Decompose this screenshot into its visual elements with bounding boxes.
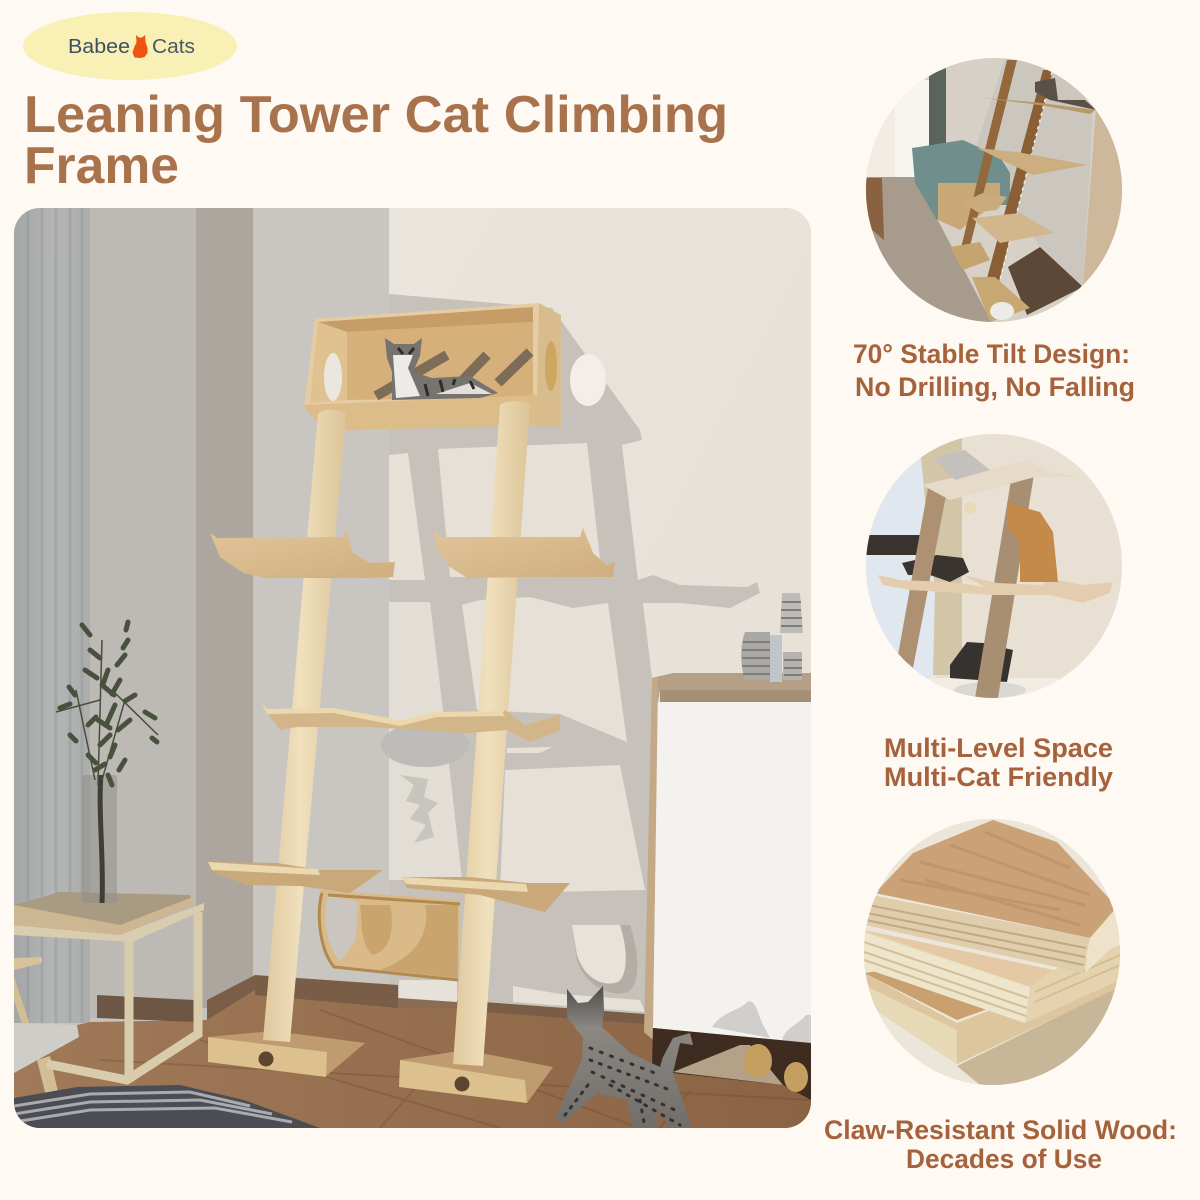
curtain	[14, 208, 90, 1023]
tower: sisal posts	[263, 401, 530, 1066]
icon: orange cat silhouette	[132, 35, 148, 58]
circular photo 2: cats on tower	[866, 434, 1122, 700]
tower: hanging tunnel	[318, 890, 460, 980]
shelves	[983, 98, 1095, 114]
back wall and side walls	[14, 208, 811, 1128]
title	[24, 86, 728, 195]
caption 1: No Drilling, No Falling	[855, 372, 1135, 402]
plant in glass vase	[56, 622, 158, 903]
main photo panel: cat tower in room	[14, 208, 811, 1128]
circular photo 3: solid wood planks	[864, 819, 1122, 1085]
cabinet	[644, 673, 811, 1100]
small white cat	[990, 302, 1014, 320]
logo badge	[23, 12, 237, 80]
caption 2: Multi-Cat Friendly	[884, 762, 1113, 792]
caption 1	[853, 339, 1135, 402]
bottom plank	[864, 960, 1120, 1064]
circular photo 1: tilted tower beside sofa	[866, 58, 1124, 323]
top shelf	[922, 460, 1082, 500]
brand name right: Cats	[152, 36, 195, 58]
table legs and frame	[47, 912, 198, 1082]
standing tabby cat	[555, 986, 693, 1128]
chair	[14, 957, 79, 1092]
wall and window	[918, 434, 1122, 679]
tower: base feet	[208, 1032, 553, 1103]
tower: top box with cat	[302, 303, 561, 431]
side table	[14, 892, 204, 1082]
caption 2: Multi-Level Space	[884, 733, 1113, 763]
caption 3: Claw-Resistant Solid Wood:	[824, 1115, 1177, 1145]
title: Frame	[24, 137, 179, 195]
leaning posts	[960, 60, 1017, 254]
dark cat at top	[1035, 78, 1096, 110]
posts	[898, 488, 947, 668]
tower: lower shelves	[208, 862, 570, 912]
floor	[866, 177, 992, 323]
metal canisters	[741, 593, 803, 682]
black cat lower	[950, 642, 1013, 682]
glass bowl reflection	[381, 728, 469, 767]
grey cat	[933, 450, 990, 480]
floor and skirting	[14, 975, 811, 1128]
middle plank	[864, 930, 1120, 1023]
title: Leaning Tower Cat Climbing	[24, 86, 728, 144]
sofa	[912, 140, 1010, 220]
caption 3	[824, 1115, 1177, 1174]
caption 3: Decades of Use	[906, 1144, 1102, 1174]
wall shadow of the tower	[381, 294, 760, 1015]
top plank	[875, 820, 1117, 938]
caption 2	[884, 733, 1113, 792]
cat on top shelf	[385, 338, 498, 400]
woven table top	[14, 892, 193, 935]
striped rug	[14, 1085, 320, 1128]
tower: middle shelf	[262, 703, 560, 742]
caption 1: 70° Stable Tilt Design:	[853, 339, 1130, 369]
black cat middle	[902, 555, 969, 582]
brand name left: Babee	[68, 36, 130, 58]
ginger cat	[1007, 503, 1058, 582]
shoes under cabinet	[744, 1044, 808, 1092]
cat shelves	[878, 575, 1113, 603]
room background	[866, 58, 1122, 322]
tower: upper shelves	[210, 528, 615, 578]
